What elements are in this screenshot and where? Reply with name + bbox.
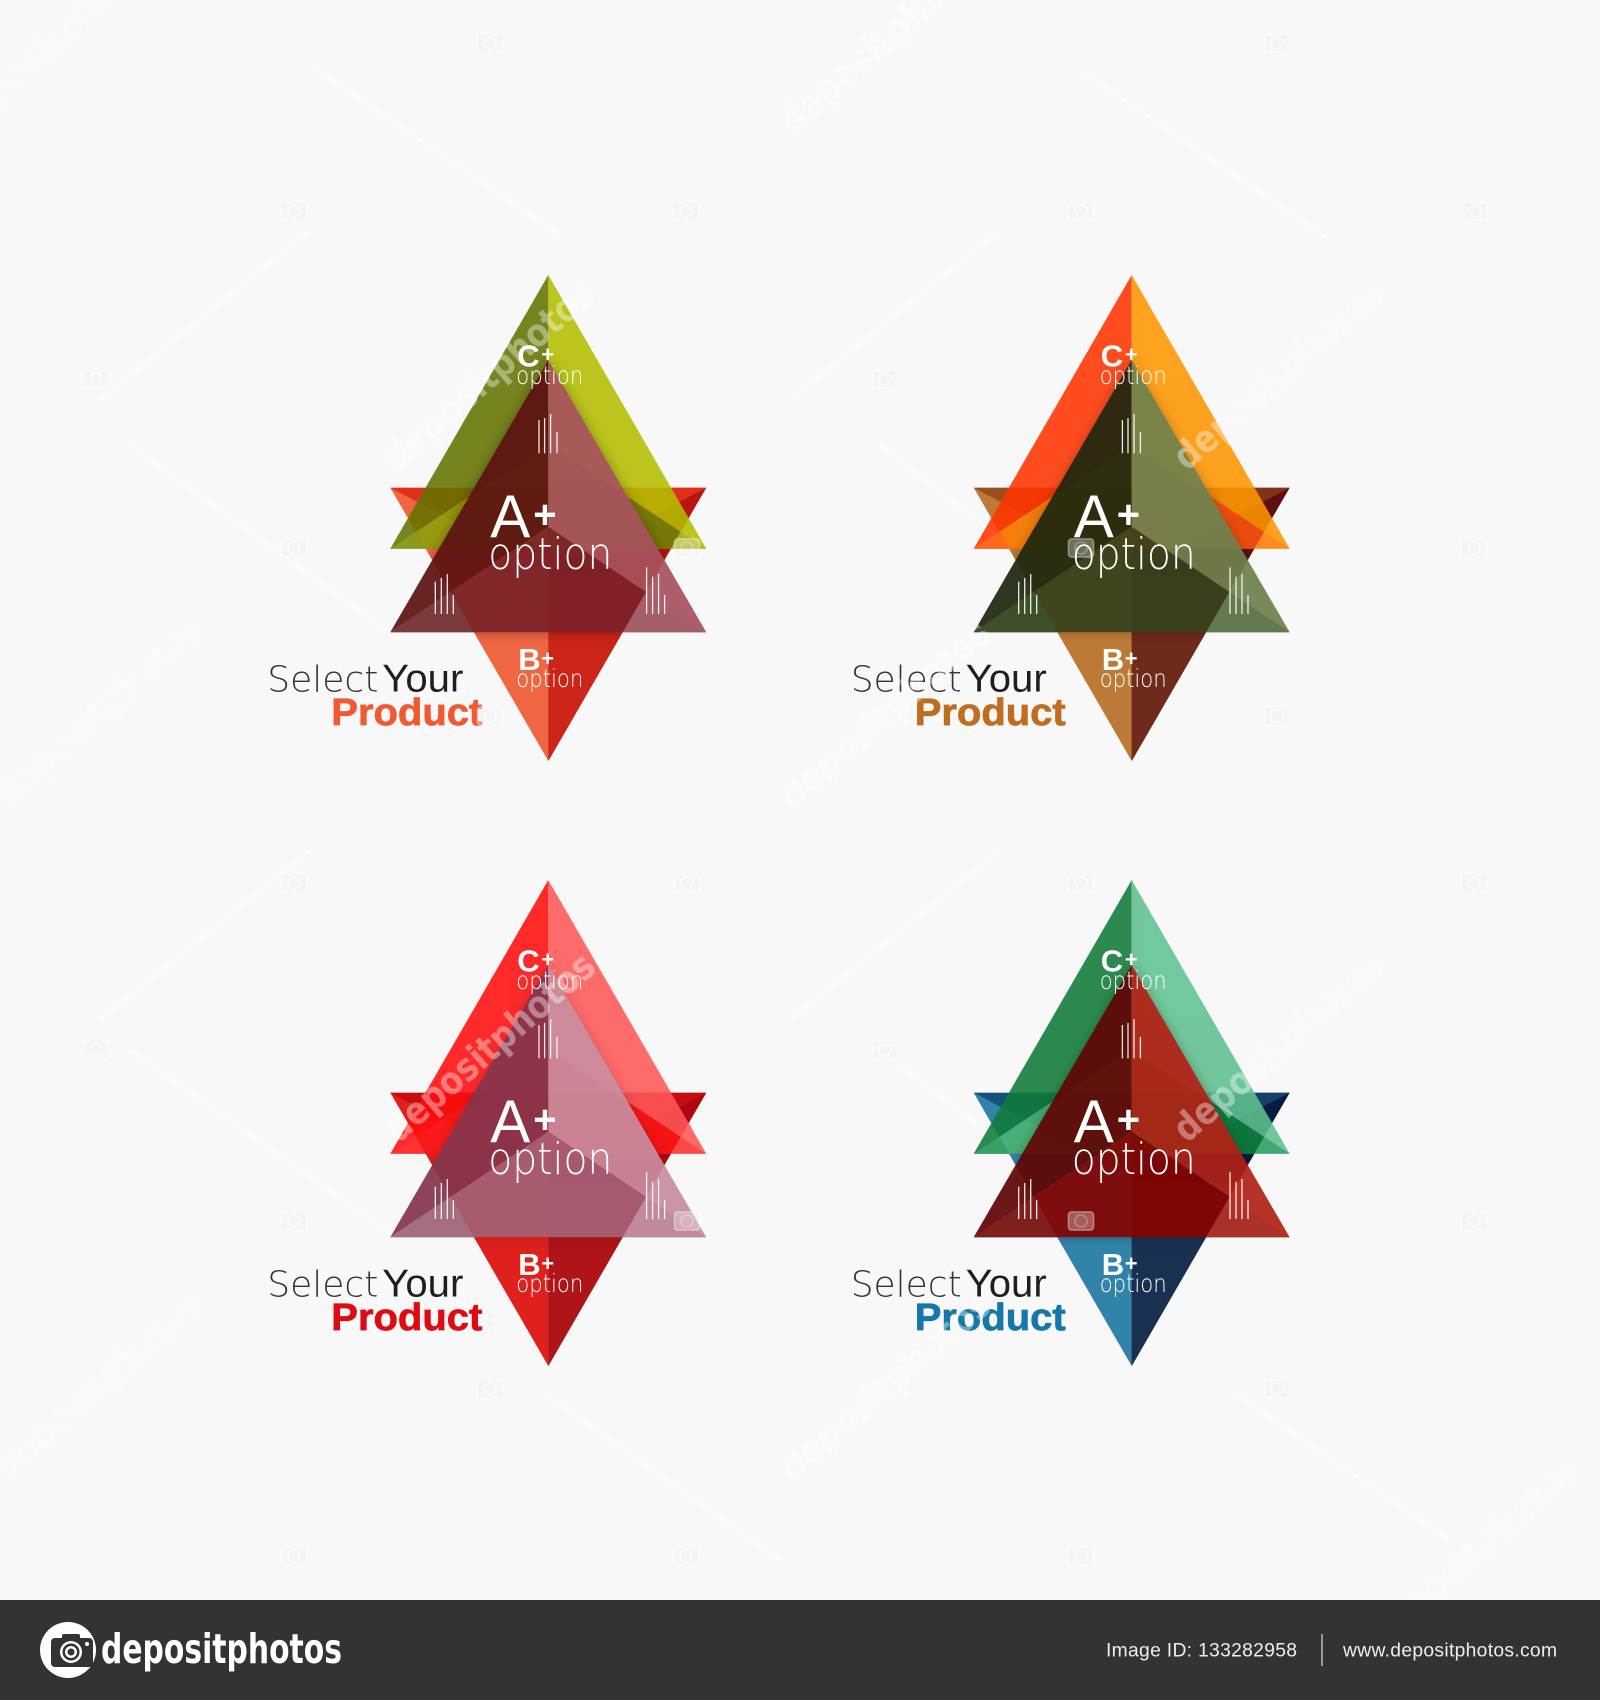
label A+ option: A	[1074, 1088, 1114, 1155]
depositphotos diagonal watermarks: depositphotos	[770, 1283, 999, 1490]
title Select Your Product: Select	[851, 660, 962, 701]
title Select Your Product	[851, 658, 1066, 734]
left bars icon	[1019, 1179, 1037, 1219]
label B+ option	[516, 642, 583, 693]
title Select Your Product	[851, 1263, 1066, 1339]
title Select Your Product: Select	[267, 660, 378, 701]
label A+ option: +	[533, 1098, 557, 1142]
label C+ option: C	[517, 944, 540, 979]
label C+ option: +	[1125, 342, 1138, 367]
label A+ option	[488, 483, 612, 580]
label A+ option: +	[1117, 493, 1140, 537]
label B+ option: B	[518, 642, 541, 677]
depositphotos diagonal watermarks: depositphotos	[770, 611, 999, 818]
label B+ option	[1100, 1247, 1167, 1298]
back inverted triangle	[390, 1093, 706, 1366]
label C+ option	[516, 339, 583, 390]
front triangle A	[974, 965, 1290, 1237]
label B+ option	[516, 1247, 583, 1298]
label A+ option: option	[1072, 529, 1196, 580]
title Select Your Product: Your	[966, 1263, 1047, 1306]
top bars icon	[1122, 414, 1140, 453]
logo wordmark: depositphotos	[101, 1625, 342, 1673]
title Select Your Product: Select	[851, 1265, 962, 1306]
left bars icon	[435, 1179, 453, 1219]
label C+ option: +	[1125, 947, 1138, 972]
label A+ option: A	[490, 1088, 530, 1155]
label A+ option	[1072, 1088, 1196, 1185]
right bars icon	[1230, 567, 1248, 614]
label A+ option: A	[1074, 483, 1114, 550]
label C+ option	[1100, 944, 1167, 995]
label C+ option: option	[516, 361, 583, 390]
depositphotos diagonal watermarks: depositphotos	[1164, 944, 1393, 1151]
label B+ option: B	[1102, 642, 1124, 677]
label B+ option: B	[1102, 1247, 1124, 1282]
top bars icon	[1122, 1019, 1140, 1058]
label B+ option	[1100, 642, 1167, 693]
upper triangle C	[974, 275, 1290, 549]
back inverted triangle	[974, 488, 1290, 761]
product graphic: orange and green	[851, 275, 1290, 761]
footer bar	[0, 1600, 1600, 1700]
label C+ option	[1100, 339, 1167, 390]
label A+ option: option	[1072, 1134, 1196, 1185]
top bars icon	[539, 414, 557, 453]
title Select Your Product	[267, 658, 483, 734]
title Select Your Product	[267, 1263, 483, 1339]
label B+ option: +	[541, 646, 554, 671]
soft shadow of front triangle	[430, 966, 666, 1242]
label C+ option: C	[1101, 944, 1123, 979]
depositphotos diagonal watermarks: depositphotos	[1164, 272, 1393, 479]
label C+ option: +	[541, 342, 554, 367]
product graphic: red and pink	[267, 880, 706, 1366]
website url: www.depositphotos.com	[1342, 1641, 1557, 1662]
title Select Your Product: Your	[382, 658, 463, 701]
label A+ option: option	[488, 529, 612, 580]
product graphic: olive and red	[267, 275, 706, 761]
label B+ option: +	[1125, 1251, 1138, 1276]
label A+ option	[488, 1088, 612, 1185]
depositphotos diagonal watermarks: depositphotos	[374, 272, 603, 479]
right bars icon	[647, 1172, 665, 1219]
label C+ option: option	[1100, 966, 1167, 995]
label B+ option: B	[518, 1247, 541, 1282]
front triangle corner facets	[974, 592, 1290, 632]
label C+ option: option	[1100, 361, 1167, 390]
front triangle corner facets	[390, 592, 706, 632]
back inverted triangle	[974, 1093, 1290, 1366]
label C+ option: C	[1101, 339, 1123, 374]
label A+ option: +	[1117, 1098, 1140, 1142]
title Select Your Product: Product	[915, 692, 1066, 734]
soft shadow of front triangle	[1013, 360, 1249, 638]
label A+ option: +	[533, 493, 557, 537]
label A+ option	[1072, 483, 1196, 580]
label C+ option: +	[541, 947, 554, 972]
label A+ option: A	[490, 483, 530, 550]
label A+ option: option	[488, 1134, 612, 1185]
icon: camera logo	[40, 1622, 96, 1678]
title Select Your Product: Your	[966, 658, 1047, 701]
title Select Your Product: Product	[331, 692, 483, 734]
watermark camera icons	[84, 34, 1488, 1565]
label C+ option: option	[516, 966, 583, 995]
label C+ option	[516, 944, 583, 995]
title Select Your Product: Select	[267, 1265, 378, 1306]
label B+ option: option	[1100, 664, 1167, 693]
soft shadow of front triangle	[428, 360, 668, 640]
depositphotos diagonal watermarks: depositphotos	[375, 944, 604, 1151]
label B+ option: option	[516, 1269, 583, 1298]
product graphic: green and crimson	[851, 880, 1290, 1366]
title Select Your Product: Your	[382, 1263, 463, 1306]
image id: Image ID: 133282958	[1106, 1641, 1297, 1662]
right bars icon	[1230, 1172, 1248, 1219]
upper triangle C	[390, 880, 706, 1154]
front triangle A	[390, 360, 706, 632]
left bars icon	[435, 574, 453, 614]
label B+ option: option	[1100, 1269, 1167, 1298]
front triangle corner facets	[974, 1197, 1290, 1237]
label B+ option: option	[516, 664, 583, 693]
title Select Your Product: Product	[331, 1297, 483, 1339]
label B+ option: +	[1125, 646, 1138, 671]
front triangle A	[974, 360, 1290, 632]
front triangle A	[390, 965, 706, 1237]
soft shadow of front triangle	[1012, 965, 1248, 1242]
title Select Your Product: Product	[915, 1297, 1066, 1339]
right bars icon	[647, 567, 665, 614]
top bars icon	[539, 1019, 557, 1058]
upper triangle C	[974, 880, 1290, 1154]
label B+ option: +	[541, 1251, 554, 1276]
label C+ option: C	[517, 339, 540, 374]
back inverted triangle	[390, 488, 706, 761]
front triangle corner facets	[390, 1197, 706, 1237]
left bars icon	[1019, 574, 1037, 614]
upper triangle C	[390, 275, 706, 549]
